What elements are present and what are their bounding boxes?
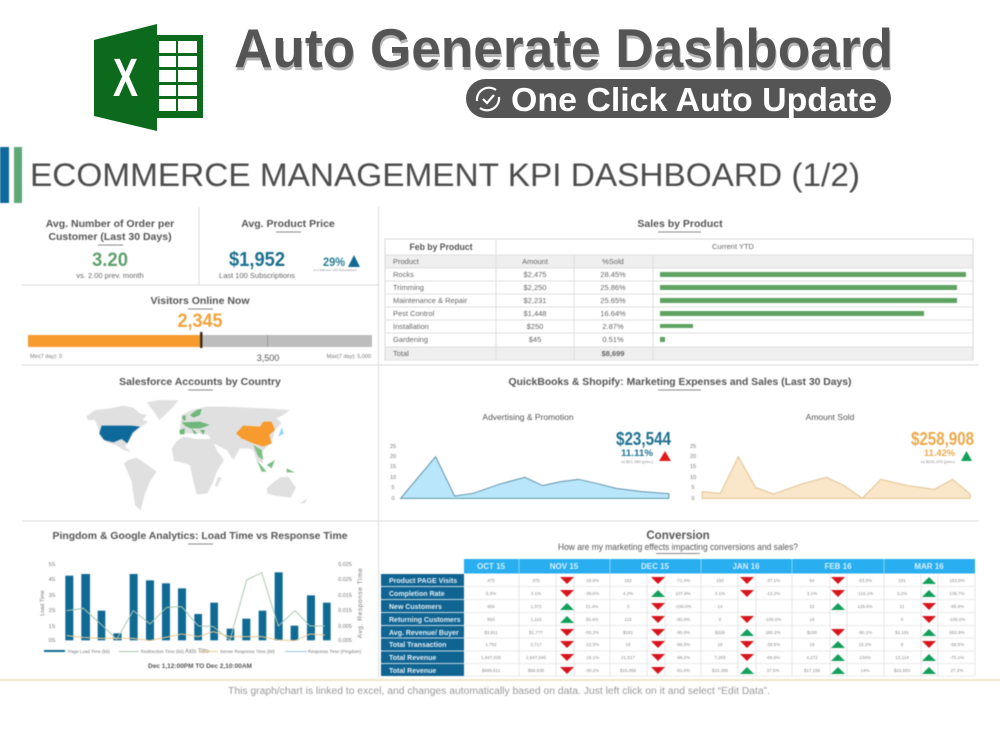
chart axes: 0.015 xyxy=(338,593,352,599)
dashboard heading: ECOMMERCE MANAGEMENT KPI DASHBOARD (1/2) xyxy=(30,157,860,193)
table values: 19 xyxy=(809,642,815,647)
gauge bar xyxy=(28,332,372,348)
table values: -53.5% xyxy=(858,578,872,583)
panel: marketing expenses and sales xyxy=(390,376,974,502)
table values xyxy=(481,578,965,673)
table values: -75.1% xyxy=(950,655,964,660)
row labels: Avg. Revenue/ Buyer xyxy=(389,630,459,637)
area chart: amount sold xyxy=(690,412,974,502)
row labels: Total Transaction xyxy=(389,642,446,649)
area chart: advertising and promotion: 15 xyxy=(390,464,396,470)
table values: 2,847,045 xyxy=(526,655,547,660)
sales table: $8,699 xyxy=(602,349,624,358)
table values: 13,114 xyxy=(895,655,909,660)
table values: 0 xyxy=(719,617,722,622)
sales table: Rocks xyxy=(393,270,414,279)
table values: -98.2% xyxy=(676,655,690,660)
panel: average product price: Avg. Product Price xyxy=(241,218,335,230)
area chart: amount sold: $258,908 xyxy=(911,429,974,449)
chart axes: 5S xyxy=(49,562,56,568)
table values: $22,503 xyxy=(894,668,911,673)
table values: 3 xyxy=(627,604,630,609)
table values: -100.0% xyxy=(949,617,965,622)
panel: conversion table: How are my marketing effects impacting conversions and sales? xyxy=(558,542,798,553)
row labels: Product PAGE Visits xyxy=(389,578,457,585)
table values: 850 xyxy=(487,617,495,622)
table values: $1,191 xyxy=(895,630,909,635)
area chart: amount sold: 10 xyxy=(690,475,696,481)
lines: response times xyxy=(67,573,325,641)
area chart: amount sold: 15 xyxy=(690,464,696,470)
panel: load time vs response time xyxy=(40,530,364,670)
icon: refresh check xyxy=(477,88,499,110)
table values: 5.3% xyxy=(486,591,496,596)
red down arrows xyxy=(560,577,936,674)
table values: 107.9% xyxy=(675,591,691,596)
sales table: Gardening xyxy=(393,335,428,344)
panel: salesforce accounts map xyxy=(86,376,307,511)
area chart: advertising and promotion: Advertising & Promotion xyxy=(482,412,574,422)
chart axes xyxy=(40,562,364,644)
area chart: advertising and promotion: 0 xyxy=(391,496,395,502)
month header: MAR 16 xyxy=(914,562,944,571)
panel: visitors online now: Max(7 day): 5,000 xyxy=(327,354,371,360)
area chart: advertising and promotion xyxy=(390,412,671,502)
chart legend: Server Response Time (bit) xyxy=(220,649,275,654)
chart legend: Axis Title xyxy=(185,649,210,655)
chart axes: 2S xyxy=(49,608,56,614)
sales table: Current YTD xyxy=(712,242,755,251)
area chart: amount sold: 0 xyxy=(691,496,695,502)
table values: $999,611 xyxy=(482,668,501,673)
chart axes: 0.025 xyxy=(338,577,352,583)
table values: -39.5% xyxy=(766,642,780,647)
table values: 375 xyxy=(532,578,540,583)
panel: average product price: $1,952 xyxy=(229,249,285,271)
table values: -71.4% xyxy=(676,578,690,583)
panel: visitors online now: 3,500 xyxy=(257,353,279,363)
sales table: Maintenance & Repair xyxy=(393,296,468,305)
table values: $16,395 xyxy=(712,668,729,673)
sales table: Feb by Product xyxy=(410,242,472,252)
row labels: Returning Customers xyxy=(389,617,461,624)
world map xyxy=(86,400,307,511)
table values: -13.2% xyxy=(766,591,780,596)
table values: 1,947,035 xyxy=(481,655,502,660)
row labels: Completion Rate xyxy=(389,591,445,598)
icon: Excel logo xyxy=(94,24,203,131)
panel: visitors online now: 2,345 xyxy=(178,311,223,332)
chart legend xyxy=(44,649,362,655)
row labels: Total Revenue xyxy=(389,655,436,662)
month header: NOV 15 xyxy=(550,562,579,571)
sales table: Product xyxy=(393,257,420,266)
month header: FEB 16 xyxy=(824,562,852,571)
sales table: $2,231 xyxy=(524,296,546,305)
panel: sales by product xyxy=(385,218,973,360)
green up arrows xyxy=(560,577,936,674)
panel: salesforce accounts map: Salesforce Accounts by Country xyxy=(119,376,281,388)
icon: up triangle xyxy=(348,255,360,267)
table values: -66.6% xyxy=(766,655,780,660)
sales table: 0.51% xyxy=(602,335,624,344)
chart legend: Response Time (Pingdom) xyxy=(308,649,362,654)
sales table xyxy=(385,239,973,360)
table values: $326 xyxy=(715,630,726,635)
panel: visitors online now xyxy=(28,295,372,363)
panel: average product price: Last 100 Subscriptions xyxy=(219,271,295,280)
sales table: $45 xyxy=(529,335,541,344)
table values: 1,116 xyxy=(531,617,542,622)
title: Auto Generate Dashboard xyxy=(235,20,894,82)
table values: 150 xyxy=(716,578,724,583)
area chart: advertising and promotion: 20 xyxy=(390,454,396,460)
footer note: This graph/chart is linked to excel, and changes automatically based on data. Just left click on it and select “Edit Data”. xyxy=(228,686,770,697)
table values: 16 xyxy=(625,642,631,647)
table values: 3.2% xyxy=(897,591,907,596)
row labels: Total Revenue xyxy=(389,668,436,675)
panel: average orders per customer: vs. 2.00 prev. month xyxy=(76,271,144,280)
table values: $181 xyxy=(623,630,634,635)
badge: One Click Auto Update: One Click Auto Update xyxy=(511,81,877,118)
table values: 0 xyxy=(901,617,904,622)
sales table: Installation xyxy=(393,322,429,331)
table values: -100.0% xyxy=(675,604,691,609)
area chart: advertising and promotion: 11.11% xyxy=(621,448,654,459)
table values: 15.2% xyxy=(859,642,871,647)
sales table: 16.64% xyxy=(600,309,626,318)
sales table: 25.65% xyxy=(600,296,626,305)
table values: 3,717 xyxy=(530,642,542,647)
area chart: amount sold: 11.42% xyxy=(924,448,956,459)
table values: 11 xyxy=(900,604,905,609)
table values: -55.2% xyxy=(585,630,599,635)
panel: load time vs response time: Pingdom & Google Analytics: Load Time vs Response Time xyxy=(52,530,348,542)
panel: conversion table: Conversion xyxy=(646,530,710,542)
sales table: $250 xyxy=(527,322,543,331)
table values: 8 xyxy=(901,642,904,647)
table values: 3.1% xyxy=(807,591,817,596)
panel: average product price: 29% xyxy=(323,257,345,269)
icon: red up triangle xyxy=(659,451,671,461)
table values: 21,517 xyxy=(621,655,635,660)
table values: $3,911 xyxy=(484,630,498,635)
sales table: 28.45% xyxy=(600,270,626,279)
sales table: $2,250 xyxy=(524,283,546,292)
chart axes: Avg. Response Time xyxy=(357,568,364,638)
panel: visitors online now: Min(7 day): 0 xyxy=(30,354,62,360)
icon: green up triangle xyxy=(961,451,972,461)
table values: $15,056 xyxy=(620,668,637,673)
table values: 115 xyxy=(624,617,632,622)
table values: 180.2% xyxy=(765,630,781,635)
table values: 14 xyxy=(717,604,723,609)
panel: average orders per customer: Customer (Last 30 Days) xyxy=(48,231,172,243)
sales table: Trimming xyxy=(393,283,424,292)
panel: load time vs response time: Dec 1,12:00PM TO Dec 2,10:00AM xyxy=(148,663,252,670)
table values: 21.4% xyxy=(586,604,598,609)
dashboard accent bars xyxy=(0,147,22,203)
table values: -95.9% xyxy=(950,604,964,609)
table values: 3.1% xyxy=(715,591,725,596)
table values: -15.1% xyxy=(585,655,599,660)
table values: 3.1% xyxy=(531,591,541,596)
table values: 16 xyxy=(717,642,723,647)
sales bars xyxy=(660,272,966,342)
panel: visitors online now: Visitors Online Now xyxy=(150,295,250,307)
table values: 14% xyxy=(860,668,870,673)
table values: -15.6% xyxy=(585,578,599,583)
month header: JAN 16 xyxy=(732,562,760,571)
table values: -90.6% xyxy=(676,630,690,635)
table values: 162 xyxy=(624,578,632,583)
sales table: $1,448 xyxy=(524,309,546,318)
table values: -58.5% xyxy=(950,642,964,647)
chart legend: Page Load Time (bit) xyxy=(68,649,110,654)
chart axes: 0.005 xyxy=(338,638,352,644)
footer rule xyxy=(0,679,1000,681)
area chart: amount sold: 25 xyxy=(690,444,696,450)
table values: -100.0% xyxy=(765,617,781,622)
title: Auto Generate Dashboard xyxy=(234,17,893,79)
table values: $1,777 xyxy=(529,630,543,635)
panel: average orders per customer: 3.20 xyxy=(92,250,128,271)
chart legend: Redirection Time (bit) xyxy=(141,649,184,654)
table values: 30.4% xyxy=(586,617,598,622)
table values: -116.1% xyxy=(857,591,873,596)
chart axes: 1S xyxy=(49,624,56,630)
table values: -30.2% xyxy=(585,668,599,673)
table values: 1,372 xyxy=(530,604,542,609)
table values: 101 xyxy=(898,578,906,583)
icon: Excel logo: X xyxy=(113,48,138,108)
table values: 27.2% xyxy=(951,668,963,673)
area chart: amount sold: 20 xyxy=(690,454,696,460)
table values: 64 xyxy=(809,578,815,583)
bars: page load time xyxy=(65,572,331,640)
table values: 1,792 xyxy=(485,642,497,647)
table values: 7,265 xyxy=(714,655,726,660)
area chart: advertising and promotion: 5 xyxy=(391,485,395,491)
chart axes: 0.005 xyxy=(338,624,352,630)
table values: 22 xyxy=(809,604,815,609)
sales table: Pest Control xyxy=(393,309,435,318)
sales table: %Sold xyxy=(602,257,624,266)
panel: average orders per customer: Avg. Number of Order per xyxy=(46,218,174,230)
area chart: amount sold: Amount Sold xyxy=(806,412,855,422)
sales table: $2,475 xyxy=(524,270,546,279)
table values: -22.5% xyxy=(585,642,599,647)
sales table: 2.87% xyxy=(602,322,624,331)
area chart: amount sold: 5 xyxy=(691,485,695,491)
table values: -39.6% xyxy=(585,591,599,596)
table values: $155 xyxy=(807,630,818,635)
table values: -37.1% xyxy=(766,578,780,583)
area chart: amount sold: vs $232,375 (prev.) xyxy=(921,459,956,464)
month header: OCT 15 xyxy=(477,562,506,571)
area chart: advertising and promotion: 25 xyxy=(390,444,396,450)
area chart: advertising and promotion: vs $21,189 (prev.) xyxy=(621,459,654,464)
table values: -90.1% xyxy=(858,630,872,635)
chart axes: 3S xyxy=(49,593,56,599)
table values: 134% xyxy=(859,655,871,660)
table values: 4.2% xyxy=(623,591,633,596)
table values: 153.5% xyxy=(949,578,965,583)
chart axes: 0.025 xyxy=(338,562,352,568)
table values: 656 xyxy=(487,604,495,609)
sales table: 25.86% xyxy=(600,283,626,292)
area chart: advertising and promotion: $23,544 xyxy=(616,429,671,449)
table values: 4,272 xyxy=(806,655,818,660)
table values: $17,156 xyxy=(804,668,821,673)
panel: average product price: vs 1,508 prev. 100 Subscriptions xyxy=(313,268,357,272)
table values: 653.9% xyxy=(949,630,965,635)
panel: average product price xyxy=(219,218,360,280)
panel: marketing expenses and sales: QuickBooks & Shopify: Marketing Expenses and Sales (Last 30 Days) xyxy=(508,376,852,388)
table values: -91.6% xyxy=(676,668,690,673)
table values: 136.7% xyxy=(949,591,965,596)
month header xyxy=(464,559,975,574)
chart axes: Load Time xyxy=(40,590,46,616)
table values: 475 xyxy=(487,578,495,583)
chart axes: 4S xyxy=(49,577,56,583)
chart axes: 0S xyxy=(49,638,56,644)
area chart: advertising and promotion: 10 xyxy=(390,475,396,481)
table values: 37.5% xyxy=(767,668,779,673)
month header: DEC 15 xyxy=(641,562,670,571)
table values: 129.6% xyxy=(857,604,873,609)
dashboard xyxy=(0,147,1000,697)
sales table: Total xyxy=(393,349,409,358)
table values: 16 xyxy=(809,617,815,622)
panel: average orders per customer xyxy=(46,218,174,280)
table grid xyxy=(464,574,975,676)
panel: sales by product: Sales by Product xyxy=(637,218,723,230)
table values: -90.0% xyxy=(676,617,690,622)
chart axes: 0.015 xyxy=(338,608,352,614)
table values: $58,635 xyxy=(528,668,545,673)
row labels: New Customers xyxy=(389,604,442,611)
table values: -96.5% xyxy=(676,642,690,647)
sales table: Amount xyxy=(522,257,549,266)
row labels xyxy=(381,574,464,676)
panel: conversion table xyxy=(381,530,975,676)
